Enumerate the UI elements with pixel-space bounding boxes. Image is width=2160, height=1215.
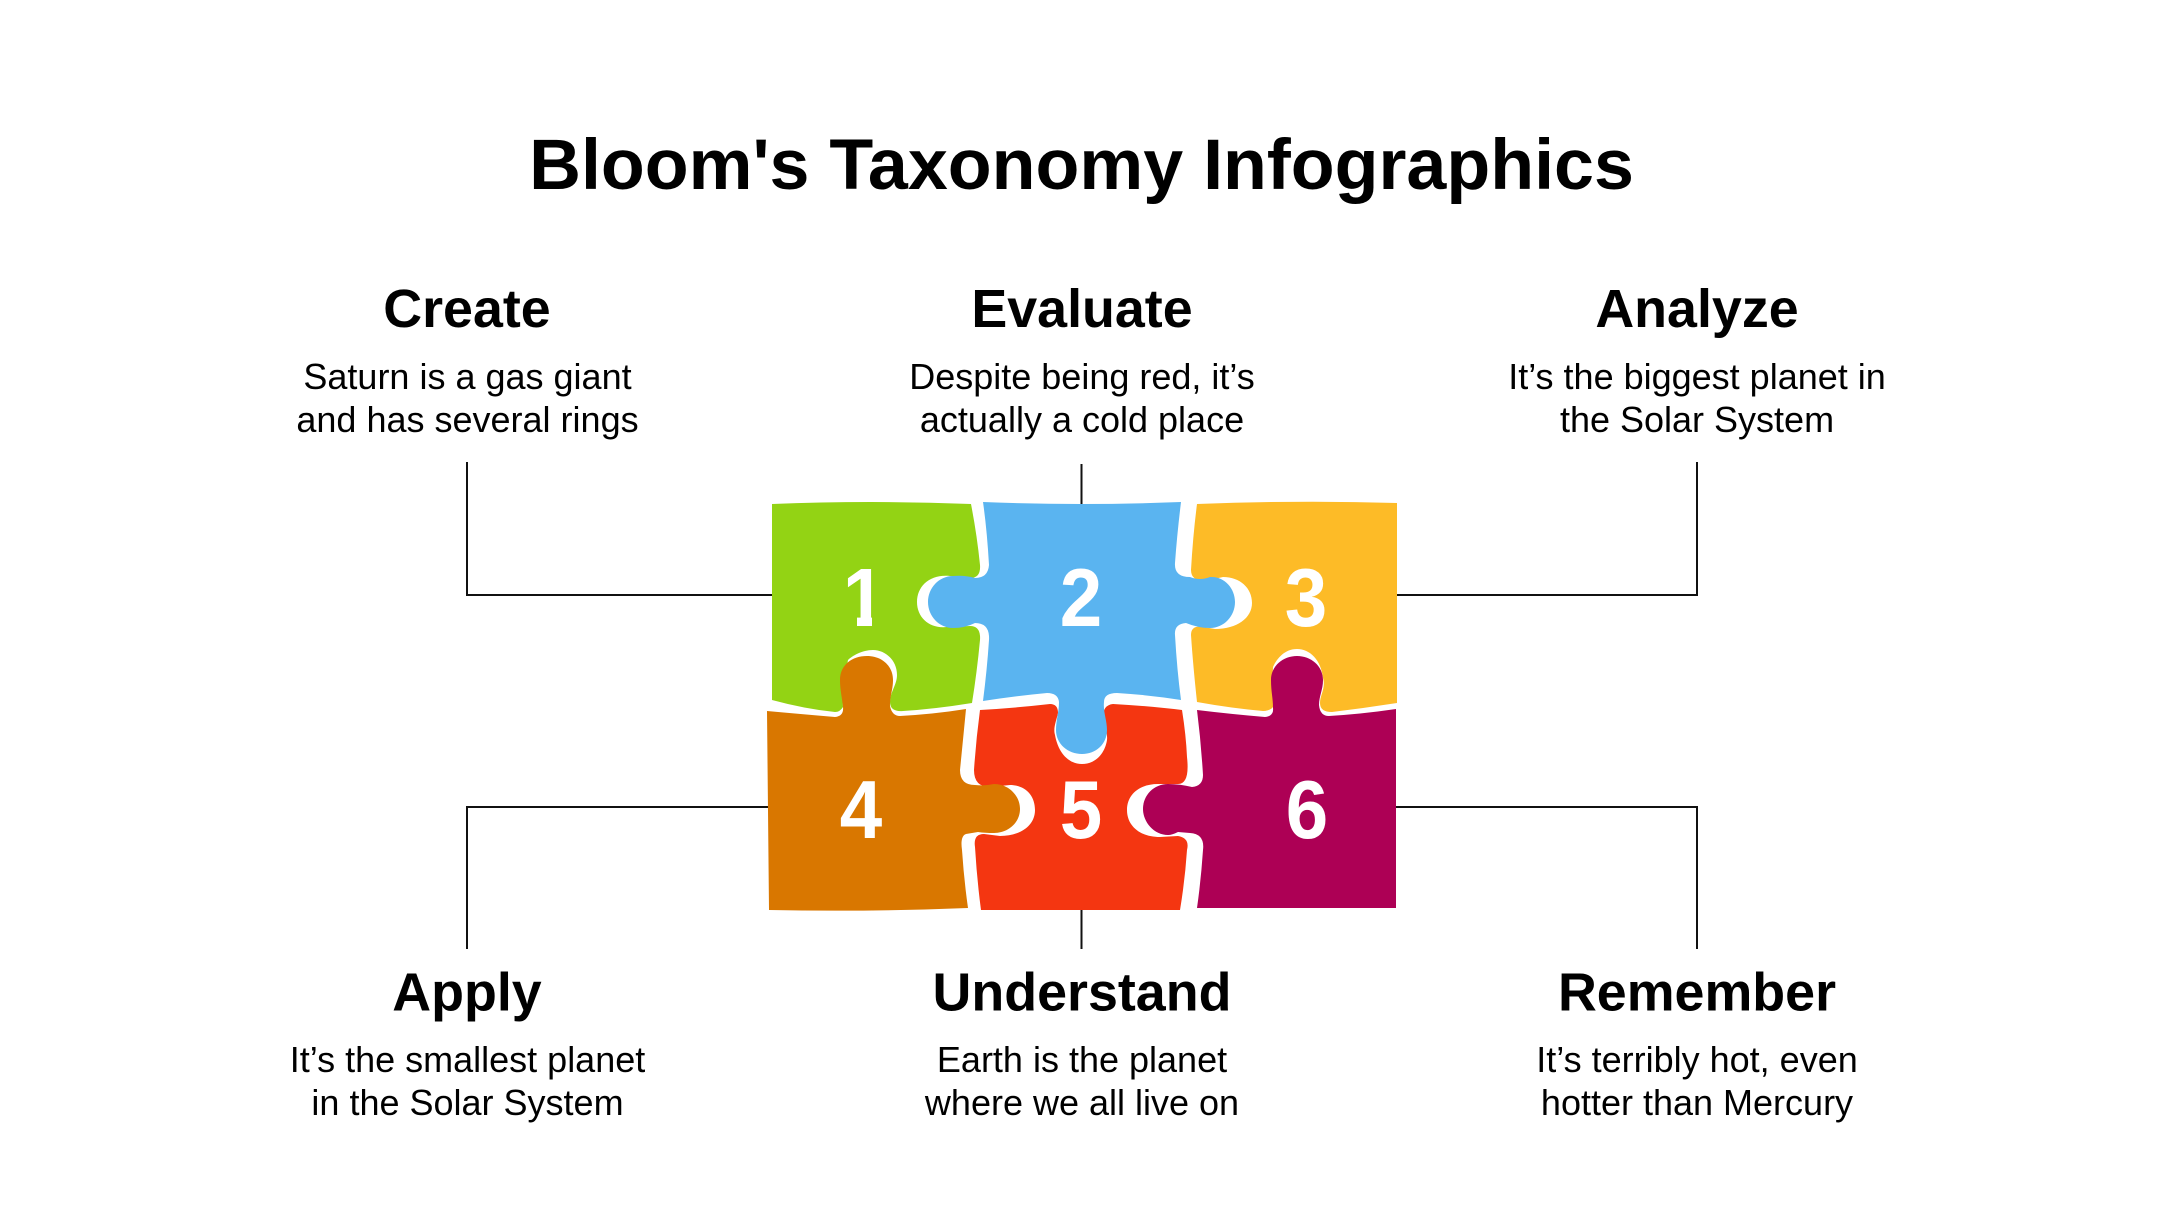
block: Understand: where we all live on xyxy=(924,1082,1239,1123)
block: Remember: Remember xyxy=(1558,962,1836,1022)
number 1: 1 xyxy=(843,551,885,644)
block: Apply: Apply xyxy=(392,962,542,1022)
block: Analyze: the Solar System xyxy=(1560,399,1834,440)
piece 2: blue xyxy=(928,502,1235,754)
piece 5: red xyxy=(974,704,1188,910)
title: Bloom's Taxonomy Infographics xyxy=(529,125,1634,205)
number 6: 6 xyxy=(1286,763,1328,856)
piece 6: purple xyxy=(1143,656,1396,908)
piece 1: green xyxy=(772,502,980,712)
number 4: 4 xyxy=(840,763,882,856)
number 5: 5 xyxy=(1060,763,1102,856)
block: Create: and has several rings xyxy=(296,399,639,440)
block: Analyze xyxy=(1508,279,1886,440)
block: Create: Saturn is a gas giant xyxy=(303,356,632,397)
jigsaw puzzle xyxy=(767,502,1397,911)
piece 3: yellow xyxy=(1191,502,1397,712)
block: Apply: in the Solar System xyxy=(311,1082,624,1123)
block: Remember xyxy=(1536,962,1858,1123)
block: Evaluate xyxy=(909,279,1255,440)
block: Analyze: It’s the biggest planet in xyxy=(1508,356,1886,397)
block: Evaluate: actually a cold place xyxy=(920,399,1244,440)
block: Remember: It’s terribly hot, even xyxy=(1536,1039,1858,1080)
block: Understand: Earth is the planet xyxy=(937,1039,1227,1080)
block: Evaluate: Evaluate xyxy=(971,279,1193,339)
block: Apply: It’s the smallest planet xyxy=(290,1039,645,1080)
block: Apply xyxy=(290,962,645,1123)
block: Analyze: Analyze xyxy=(1595,279,1799,339)
block: Understand: Understand xyxy=(933,962,1231,1022)
piece 4: orange xyxy=(767,656,1020,911)
number 3: 3 xyxy=(1285,551,1327,644)
connector lines xyxy=(467,462,1697,949)
block: Create xyxy=(296,279,639,440)
block: Understand xyxy=(924,962,1239,1123)
number 2: 2 xyxy=(1060,551,1102,644)
block: Remember: hotter than Mercury xyxy=(1541,1082,1853,1123)
block: Evaluate: Despite being red, it’s xyxy=(909,356,1255,397)
block: Create: Create xyxy=(383,279,551,339)
